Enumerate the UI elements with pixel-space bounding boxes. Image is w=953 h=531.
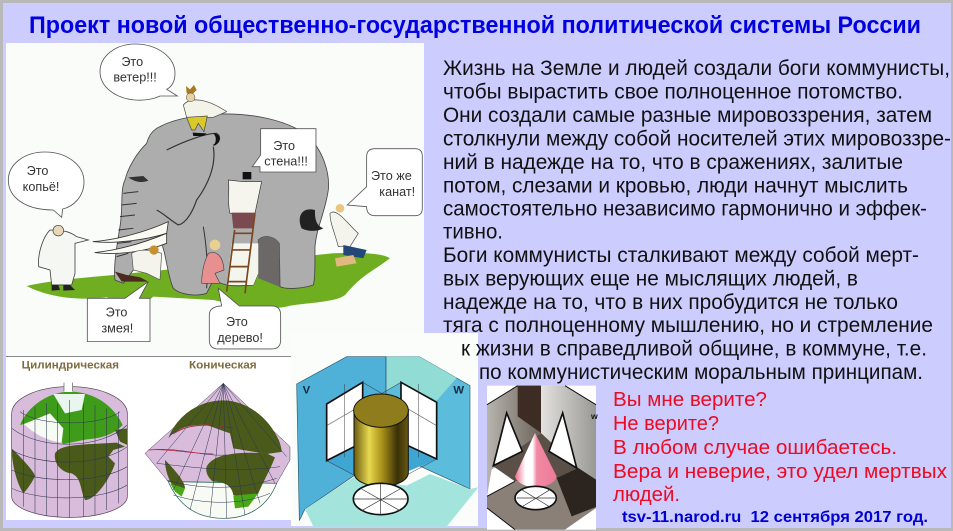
main text block: к жизни в справедливой общине, в коммуне, т.е. [461,338,927,360]
speech bubble: rope: канат! [379,185,415,199]
speech bubble: spear: Это [27,164,48,178]
speech bubble: rope: Это же [371,169,412,183]
image: cylinder projection [297,357,478,527]
image: map projections [6,356,291,520]
red closing text [613,388,948,506]
illustration: blind men and the elephant [6,43,424,356]
main text block: Жизнь на Земле и людей создали боги коммунисты, [443,57,950,80]
speech bubble: snake: Это [106,306,127,320]
main text block: тяга с полноценному мышлению, но и стремление [443,314,933,337]
man with stethoscope [38,225,88,291]
speech bubble: rope [347,149,422,216]
speech bubble: wind [100,44,177,100]
main text block: надежде на то, что в них пробудится не только [443,291,898,314]
main text block: Они создали самые разные мировоззрения, затем [443,104,932,127]
speech bubble: tree: Это [226,315,248,329]
red closing text: Не верите? [613,412,719,435]
speech bubble: spear [8,152,84,217]
main text block: столкнули между собой носителей этих мировоззре- [443,128,951,150]
main text block: потом, слезами и кровью, люди начнут мыслить [443,174,908,198]
blue walls and floor [297,357,478,527]
pink cone [515,433,557,487]
white backing of the projection image [291,333,478,526]
speech bubble: wall [252,129,316,172]
speech bubble: snake [87,282,150,342]
speech bubble: wall: стена!!! [264,155,308,169]
plan ellipse [353,483,408,515]
main text block: чтобы вырастить свое полноценное потомство. [443,80,903,104]
speech bubble: snake: змея! [101,322,133,336]
ground [27,253,390,308]
footer: source and date: tsv-11.narod.ru 12 сентября 2017 год. [622,509,928,526]
red closing text: В любом случае ошибаетесь. [613,436,897,459]
caption: cylindrical: Цилиндрическая [22,359,119,371]
wall labels: V [303,384,311,396]
caption: conical: Коническая [189,359,257,371]
speech bubble: wind: ветер!!! [113,71,157,85]
triangular projections [493,413,577,468]
speech bubble: wind: Это [121,55,143,69]
speech bubble: tree: дерево! [217,331,263,345]
red closing text: Вера и неверие, это удел мертвых [613,460,948,483]
main text block: вых верующих еще не мыслящих людей, в [443,268,858,290]
wall label: w [590,411,598,421]
red closing text: людей. [613,483,680,506]
main text block: самостоятельно независимо гармонично и эффек- [443,198,927,220]
main text block: ний в надежде на то, что в сражениях, залитые [443,151,903,174]
red closing text: Вы мне верите? [613,388,767,411]
image: cylinder projection: W [453,384,464,396]
elephant body [115,114,329,295]
speech bubble: wall: Это [273,139,295,153]
grey walls and floor [487,386,596,530]
image: cone projection [487,386,598,530]
main text block: по коммунистическим моральным принципам. [479,361,923,384]
plan ellipse [515,486,556,510]
conical projection globe [145,383,290,518]
man on ladder [227,172,262,293]
projection panels [327,382,437,461]
tusks [93,222,168,254]
speech bubble: tree [209,288,281,349]
cylindrical projection globe [12,383,127,518]
main text block: тивно. [443,220,503,244]
kneeling man [115,245,162,282]
main text block: Боги коммунисты сталкивают между собой мерт- [443,244,919,267]
tail and man at tail [300,204,367,267]
title: Проект новой общественно-государственной политической системы России [29,12,921,39]
man on top [183,85,227,136]
woman [202,240,224,283]
speech bubble: spear: копьё! [23,180,59,194]
gold cylinder [354,394,408,487]
main text block [443,57,951,384]
